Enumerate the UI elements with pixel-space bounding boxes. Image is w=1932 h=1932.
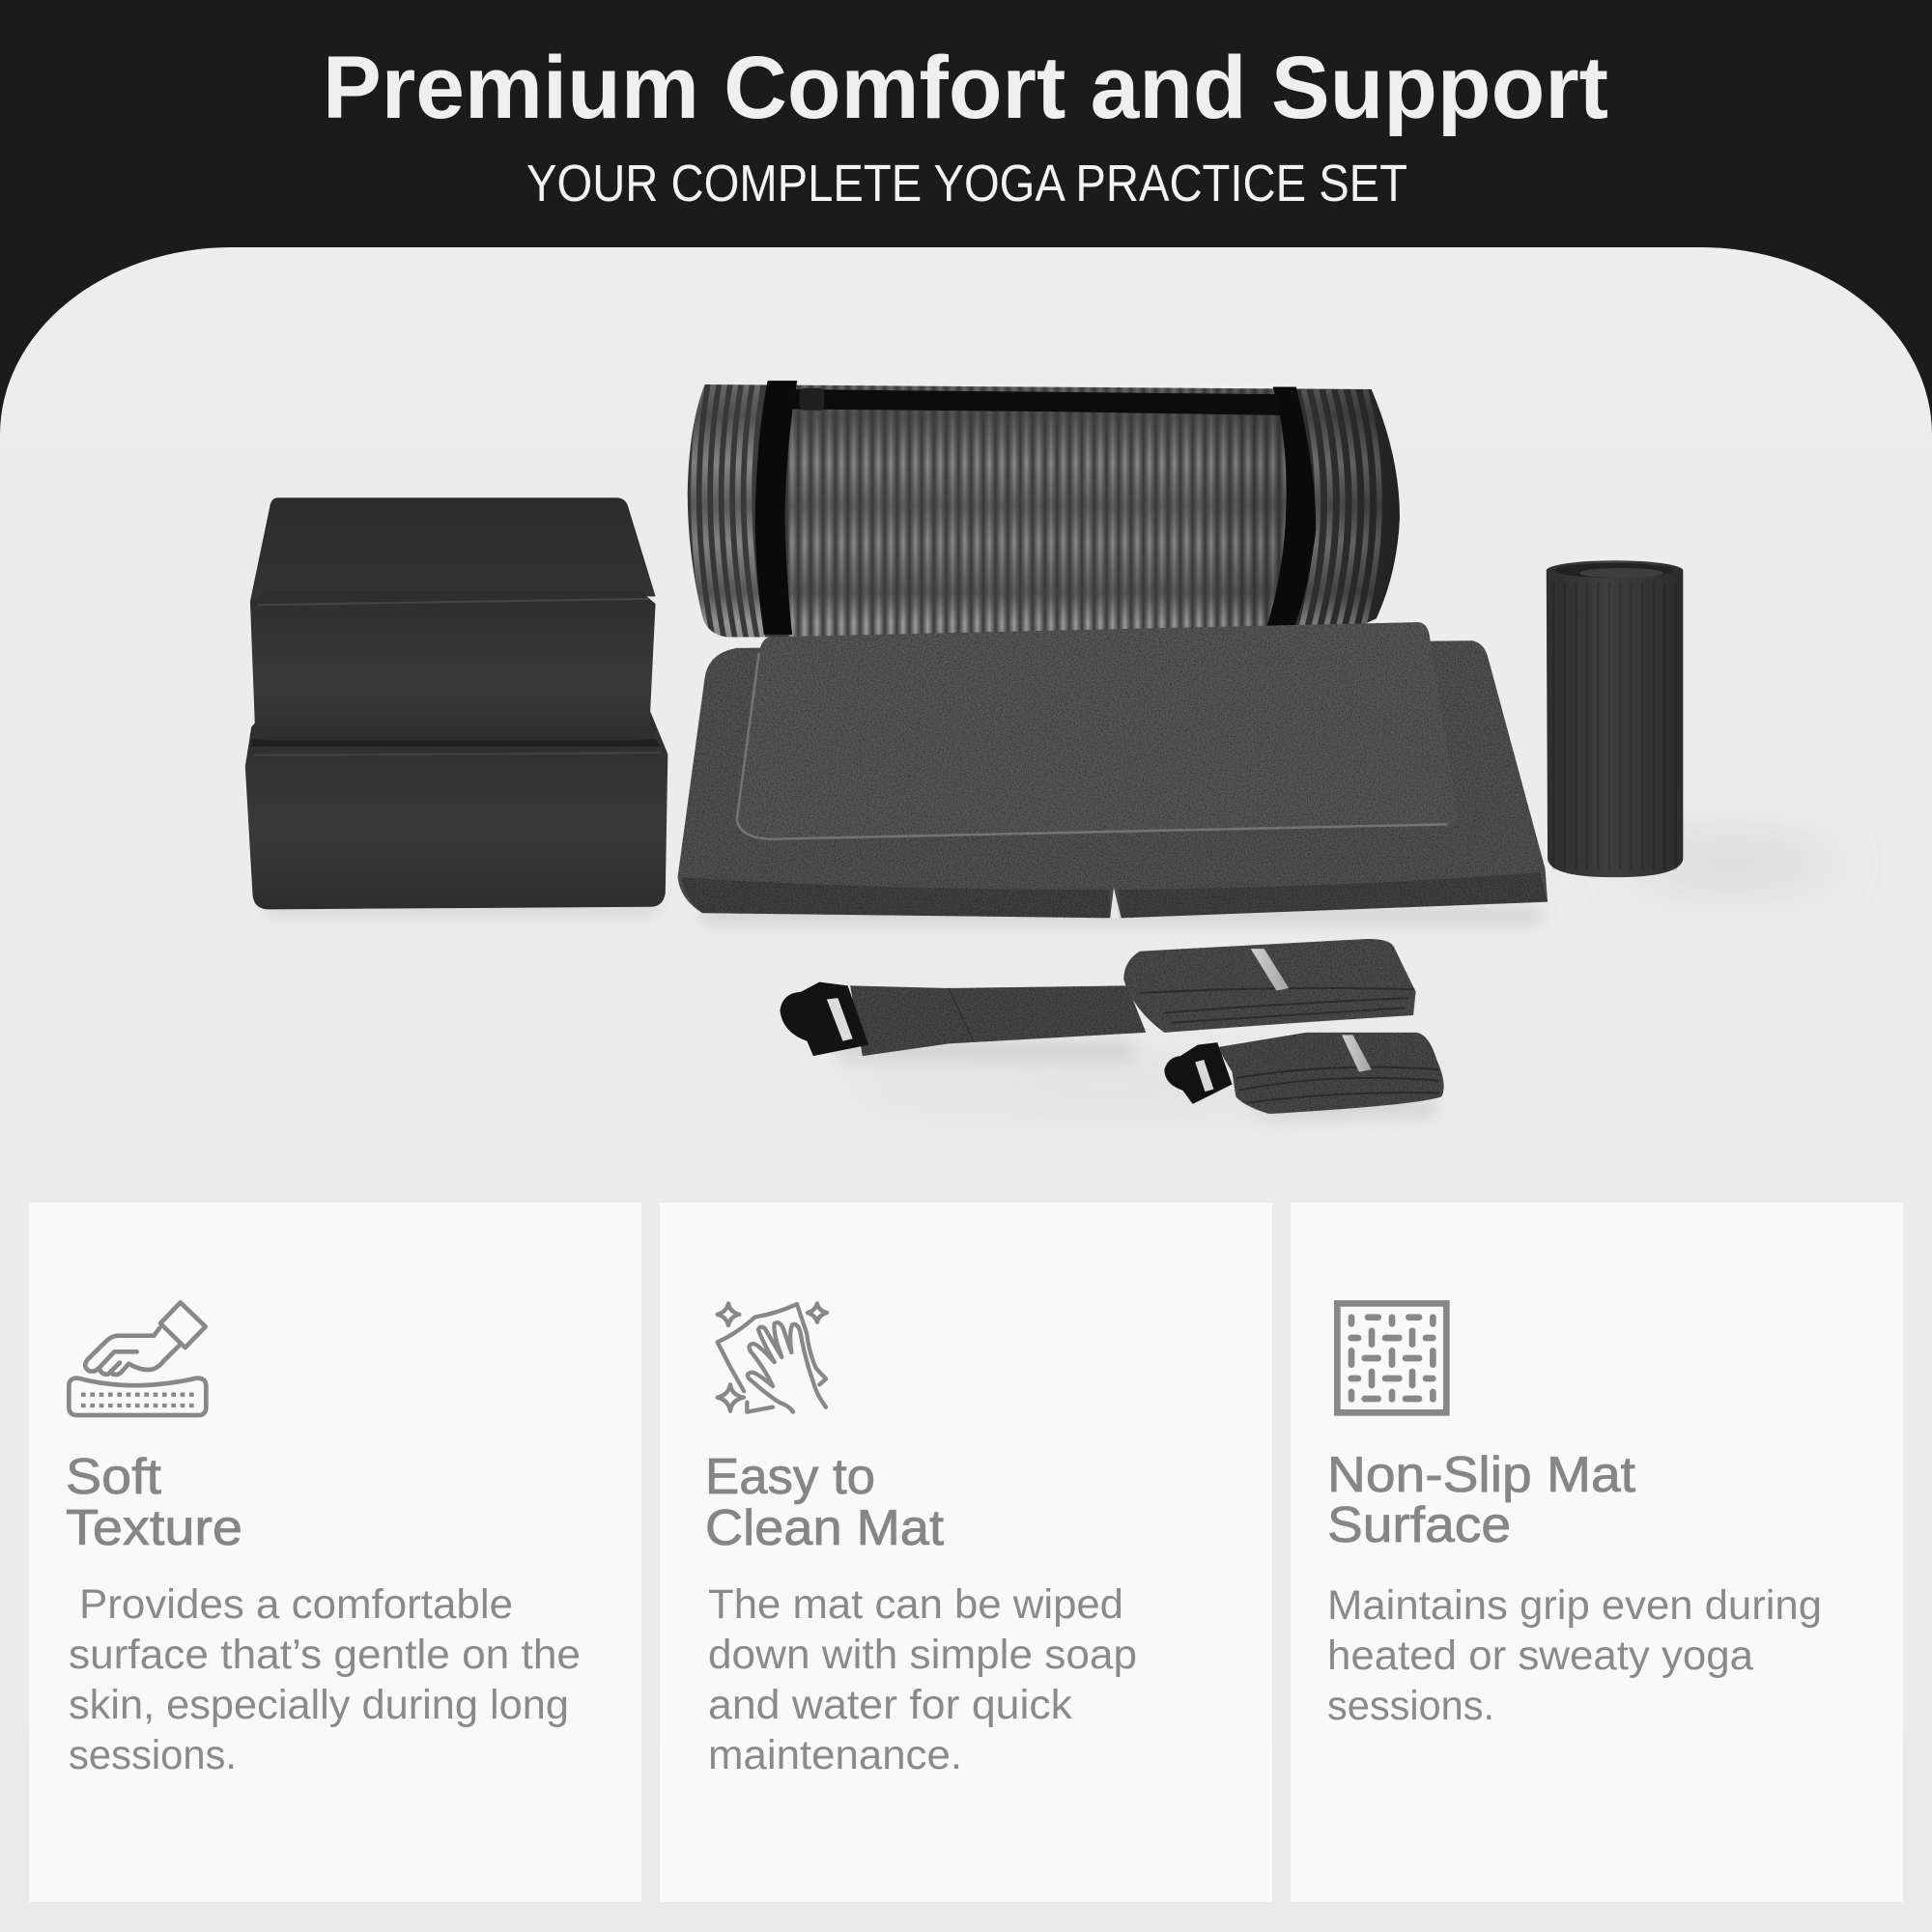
body text: soft texture: skin, especially during long [69, 1682, 569, 1728]
large towel [678, 640, 1548, 918]
left yoga block stack [245, 497, 668, 909]
heading: soft texture [66, 1449, 242, 1556]
panel: non-slip card [1291, 1203, 1903, 1902]
lower block [245, 712, 668, 909]
upper block top face [250, 497, 656, 601]
subtitle: YOUR COMPLETE YOGA PRACTICE SET [526, 155, 1407, 213]
rolled yoga mat [688, 381, 1400, 639]
icon: hand pressing foam [69, 1302, 206, 1415]
heading: non-slip mat surface: Non-Slip Mat [1327, 1447, 1636, 1503]
body text: easy to clean mat: and water for quick [708, 1682, 1073, 1728]
heading: soft texture: Soft [66, 1449, 162, 1505]
title: Premium Comfort and Support [323, 39, 1608, 137]
body text: easy to clean mat: down with simple soap [708, 1632, 1137, 1678]
towel front flap shading [681, 872, 1548, 918]
heading: easy to clean mat [705, 1449, 945, 1556]
heading: soft texture: Texture [66, 1500, 242, 1556]
panel: easy to clean card [660, 1203, 1272, 1902]
body text: non-slip mat surface: heated or sweaty yoga [1327, 1633, 1753, 1679]
mat straps [755, 381, 797, 635]
body text: easy to clean mat: maintenance. [708, 1732, 962, 1778]
heading: easy to clean mat: Easy to [705, 1449, 875, 1505]
product photo: yoga set [245, 381, 1836, 1114]
header background [0, 0, 1932, 444]
heading: easy to clean mat: Clean Mat [705, 1500, 945, 1556]
soft floor shadows [838, 845, 1836, 1094]
body text: soft texture [69, 1581, 581, 1778]
yoga strap: short [1164, 1033, 1444, 1114]
block gap shadow [251, 739, 661, 747]
body text: soft texture: Provides a comfortable [79, 1581, 513, 1628]
panel: soft texture card [29, 1203, 641, 1902]
body text: soft texture: sessions. [69, 1732, 237, 1778]
body text: easy to clean mat: The mat can be wiped [708, 1581, 1123, 1628]
body text: non-slip mat surface: sessions. [1327, 1683, 1494, 1729]
body text: non-slip mat surface [1327, 1582, 1822, 1729]
curved ribs at roll ends [694, 384, 1379, 639]
body text: soft texture: surface that’s gentle on the [69, 1632, 581, 1678]
heading: non-slip mat surface: Surface [1327, 1497, 1511, 1553]
foam roller [1547, 560, 1683, 877]
yoga strap: long [780, 939, 1416, 1056]
heading: non-slip mat surface [1327, 1447, 1636, 1553]
icon: non-slip surface grid [1337, 1303, 1446, 1412]
body text: non-slip mat surface: Maintains grip even during [1327, 1582, 1822, 1629]
small towel [737, 622, 1458, 839]
body text: easy to clean mat [708, 1581, 1137, 1778]
icon: hand wiping with cloth [718, 1303, 827, 1412]
upper block front face [250, 591, 656, 741]
